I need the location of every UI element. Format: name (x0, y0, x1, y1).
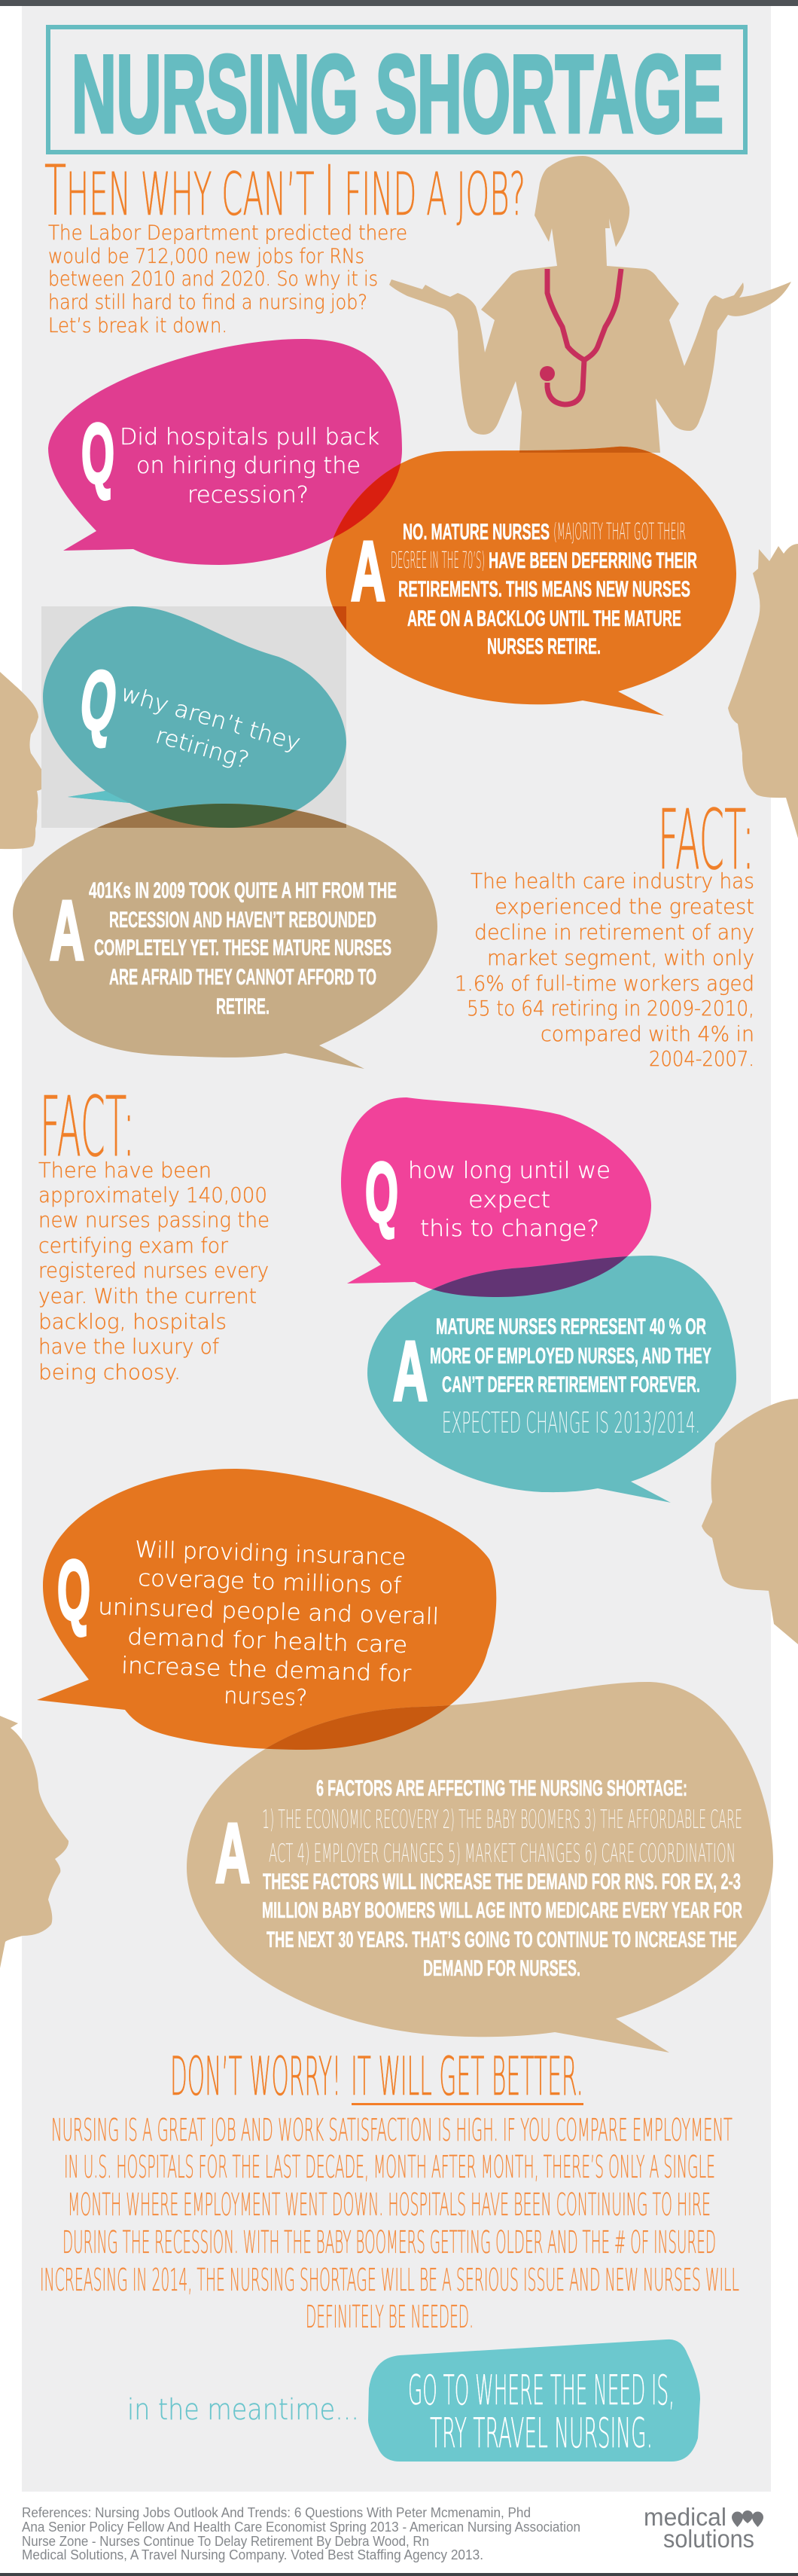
question 1 text (120, 424, 379, 508)
fact 1 (455, 792, 754, 1071)
answer 4 text: DEMAND FOR NURSES. (423, 1956, 580, 1981)
speech bubble: answer 3 (367, 1256, 736, 1503)
speech bubble: answer 2 (13, 804, 437, 1069)
speech bubble: answer 2: A (50, 884, 84, 978)
question 2 text: retiring? (153, 722, 252, 774)
answer 1 text: NO. MATURE NURSES (403, 520, 550, 545)
fact 1 text: compared with 4% in (541, 1021, 754, 1046)
fact 2 text: There have been (38, 1158, 212, 1183)
speech bubble: question 4 (37, 1469, 496, 1750)
references: Medical Solutions, A Travel Nursing Company. Voted Best Staffing Agency 2013. (22, 2547, 483, 2562)
fact 2 text (38, 1158, 270, 1384)
fact 2 text: being choosy. (38, 1360, 181, 1384)
intro text: between 2010 and 2020. So why it is (48, 267, 378, 291)
intro text: Let’s break it down. (48, 314, 227, 337)
references: Ana Senior Policy Fellow And Health Care Economist Spring 2013 - American Nursing Association (22, 2520, 580, 2535)
question 4 text: Will providing insurance (135, 1537, 407, 1571)
question 4 text: coverage to millions of (138, 1565, 402, 1599)
fact 2 text: certifying exam for (38, 1233, 228, 1258)
person silhouette: lower right head (702, 1399, 798, 1644)
speech bubble: question 4: Q (57, 1543, 90, 1637)
person silhouette: left face (0, 672, 48, 849)
intro text: hard still hard to find a nursing job? (48, 291, 367, 314)
fact 1 text: The health care industry has (471, 868, 754, 893)
fact 1 text (455, 868, 754, 1071)
fact 1 text: 2004-2007. (649, 1046, 754, 1071)
answer 4 text (262, 1776, 742, 1981)
references: References: Nursing Jobs Outlook And Trends: 6 Questions With Peter Mcmenamin, Phd (22, 2505, 531, 2520)
heading: don't worry: DON’T WORRY! (170, 2046, 341, 2107)
speech bubble: question 2: Q (75, 652, 123, 749)
answer 1 text: DEGREE IN THE 70’S) (391, 548, 485, 574)
answer 2 text: 401Ks IN 2009 TOOK QUITE A HIT FROM THE (89, 878, 397, 903)
question 1 text: recession? (187, 482, 309, 508)
closing paragraph: DEFINITELY BE NEEDED. (306, 2299, 474, 2335)
nurse silhouette with stethoscope (389, 156, 791, 453)
question 3 text: expect (468, 1187, 550, 1213)
fact 2 text: new nurses passing the (38, 1207, 270, 1232)
answer 3 text (430, 1314, 711, 1439)
answer 2 text: RECESSION AND HAVEN’T REBOUNDED (109, 908, 376, 932)
fact 1 text: decline in retirement of any (474, 920, 754, 945)
heading: then why can't I find a job: THEN WHY CAN’T I FIND A JOB? (44, 151, 525, 231)
fact 1 text: experienced the greatest (495, 894, 754, 919)
question 2 text: why aren’t they (118, 680, 303, 756)
speech bubble: question 2 (43, 606, 346, 828)
question 4 text: demand for health care (127, 1624, 408, 1659)
bottom bar (0, 2573, 798, 2576)
answer 2 text: COMPLETELY YET. THESE MATURE NURSES (94, 935, 391, 960)
speech bubble: question 3: Q (365, 1146, 398, 1240)
fact 1 text: 1.6% of full-time workers aged (455, 971, 754, 996)
intro text: The Labor Department predicted there (48, 221, 407, 245)
icon: stethoscope (540, 269, 621, 404)
fact 2 text: approximately 140,000 (38, 1183, 267, 1207)
speech bubble: question 1 (48, 339, 402, 565)
question 4 text: nurses? (224, 1683, 308, 1711)
answer 1 text (391, 519, 697, 659)
fact 1 text: 55 to 64 retiring in 2009-2010, (467, 996, 754, 1021)
fact 1 text: market segment, with only (487, 945, 754, 970)
question 4 text: uninsured people and overall (98, 1594, 440, 1630)
question 4 text (98, 1537, 440, 1711)
speech bubble: question 1: Q (81, 407, 114, 501)
grey square behind question 2 (41, 606, 346, 828)
fact 2 text: registered nurses every (38, 1258, 269, 1283)
person silhouette: right head (728, 544, 798, 838)
question 1 text: Did hospitals pull back (120, 424, 379, 450)
fact 2 (38, 1079, 270, 1384)
references (22, 2505, 580, 2562)
logo: medical solutions: medical (644, 2503, 726, 2531)
question 3 text (408, 1158, 611, 1242)
fact 2: FACT: (40, 1079, 135, 1175)
intro text: would be 712,000 new jobs for RNs (48, 245, 364, 268)
icon: map pins (732, 2510, 763, 2527)
answer 1 text: NURSES RETIRE. (487, 634, 601, 659)
speech bubble: answer 3: A (393, 1324, 428, 1418)
question 3 text: how long until we (408, 1158, 611, 1184)
question 3 text: this to change? (420, 1216, 599, 1242)
fact 2 text: have the luxury of (38, 1334, 219, 1359)
speech bubble: answer 4: A (215, 1806, 250, 1900)
question 4 text: increase the demand for (121, 1653, 412, 1687)
fact 2 text: year. With the current (38, 1283, 257, 1308)
answer 2 text (89, 878, 397, 1019)
closing paragraph (40, 2112, 739, 2335)
logo: medical solutions (644, 2503, 763, 2553)
in the meantime label: in the meantime... (127, 2393, 359, 2426)
top bar (0, 0, 798, 6)
fact 2 text: backlog, hospitals (38, 1309, 227, 1334)
speech bubble: answer 1: A (351, 524, 385, 618)
answer 2 text: RETIRE. (216, 994, 270, 1019)
question 1 text: on hiring during the (136, 453, 361, 479)
logo: medical solutions: solutions (663, 2525, 754, 2553)
references: Nurse Zone - Nurses Continue To Delay Retirement By Debra Wood, Rn (22, 2534, 429, 2549)
answer 2 text: ARE AFRAID THEY CANNOT AFFORD TO (109, 965, 376, 990)
speech bubble: answer 4 (187, 1682, 773, 2053)
person silhouette: lower left head (0, 1716, 69, 1968)
intro text (48, 221, 407, 337)
speech bubble: question 3 (341, 1097, 651, 1297)
speech bubble: answer 1 (325, 446, 736, 716)
callout: travel nursing (368, 2339, 700, 2462)
